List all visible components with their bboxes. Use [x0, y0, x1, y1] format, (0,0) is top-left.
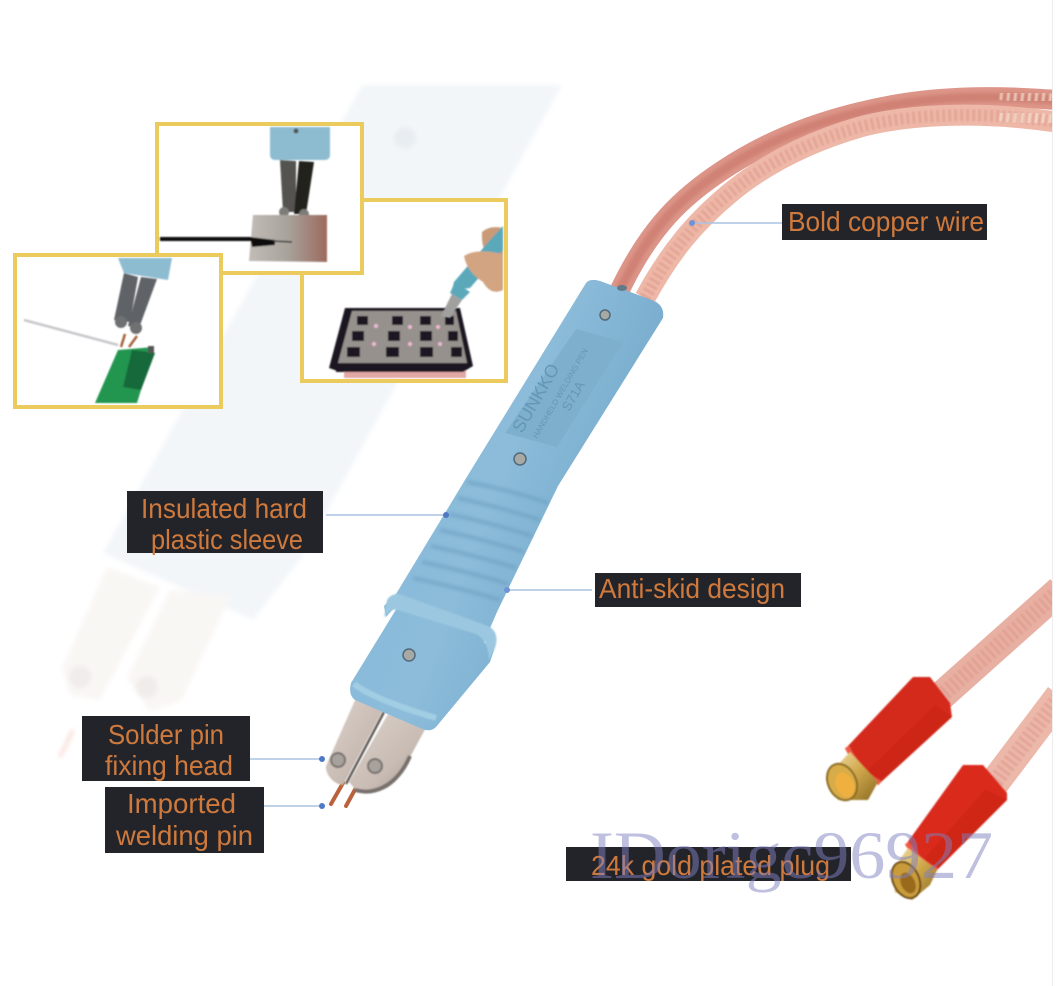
label: insulated hard plastic sleeve [127, 491, 323, 555]
label: imported welding pin: Imported [127, 788, 236, 819]
label: 24k gold plated plug: 24k gold plated plug [591, 850, 830, 881]
model plate: SUNKKO [508, 360, 563, 436]
ghost pen background [60, 85, 562, 757]
label: imported welding pin [105, 787, 264, 853]
screws [403, 310, 610, 661]
label: imported welding pin: welding pin [115, 820, 253, 851]
right image edge [1052, 0, 1054, 986]
inset photo: battery pack welding [302, 200, 506, 381]
leader: anti-skid [504, 587, 592, 593]
inset photo: probe on circuit board [15, 255, 221, 407]
leader: insulated sleeve [326, 512, 449, 518]
copper wires (lower right) [940, 590, 1060, 786]
inset photo: probe on steel sheet [157, 124, 362, 273]
label: solder pin fixing head: fixing head [105, 750, 233, 781]
steel blades [326, 698, 429, 792]
pins [331, 783, 358, 806]
model plate [505, 329, 623, 447]
top hole [617, 285, 627, 291]
label: bold copper wire: Bold copper wire [788, 206, 984, 237]
collar ring [384, 594, 496, 660]
label: anti-skid design: Anti-skid design [599, 573, 785, 604]
model plate: HANDHELD WELDING PEN [531, 347, 590, 440]
leader: welding pin [264, 803, 325, 809]
label: solder pin fixing head [82, 716, 250, 781]
battery pack [329, 308, 473, 378]
lower end highlight [354, 684, 436, 718]
welding pen [326, 280, 663, 806]
label: insulated hard plastic sleeve: plastic sleeve [151, 524, 303, 555]
model plate: S71A [559, 378, 588, 414]
grip ridges [413, 482, 548, 600]
leader: bold copper wire [689, 220, 782, 226]
red sleeve with gold plug (lower) [886, 765, 1007, 903]
red sleeve with gold plug (upper) [821, 677, 952, 805]
copper wire pair (top) [618, 94, 1056, 298]
leader: solder pin fixing head [250, 756, 325, 762]
watermark: IDorigc96927 [590, 817, 993, 893]
blue handle body [350, 280, 663, 730]
label: solder pin fixing head: Solder pin [108, 719, 224, 750]
hand and pen [441, 226, 503, 318]
label: insulated hard plastic sleeve: Insulated hard [141, 493, 307, 524]
